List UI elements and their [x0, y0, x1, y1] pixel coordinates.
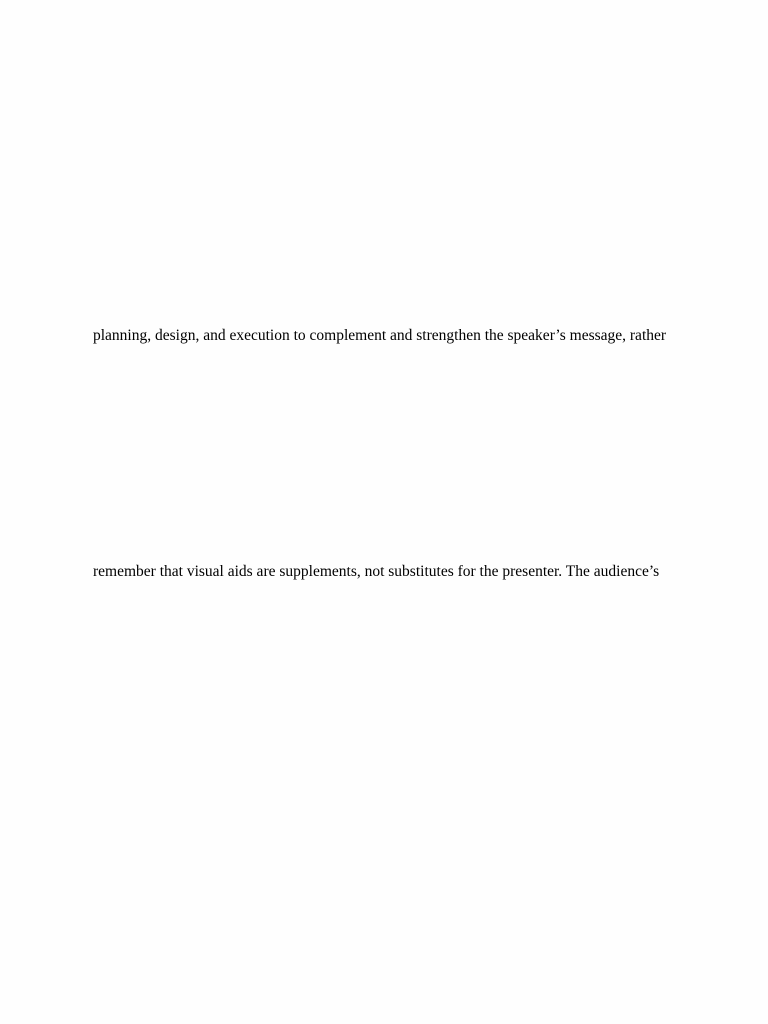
- text line 2: remember that visual aids are supplements, not substitutes for the presenter. The audience’s: [93, 563, 659, 580]
- text line 1: planning, design, and execution to complement and strengthen the speaker’s message, rather: [93, 327, 666, 344]
